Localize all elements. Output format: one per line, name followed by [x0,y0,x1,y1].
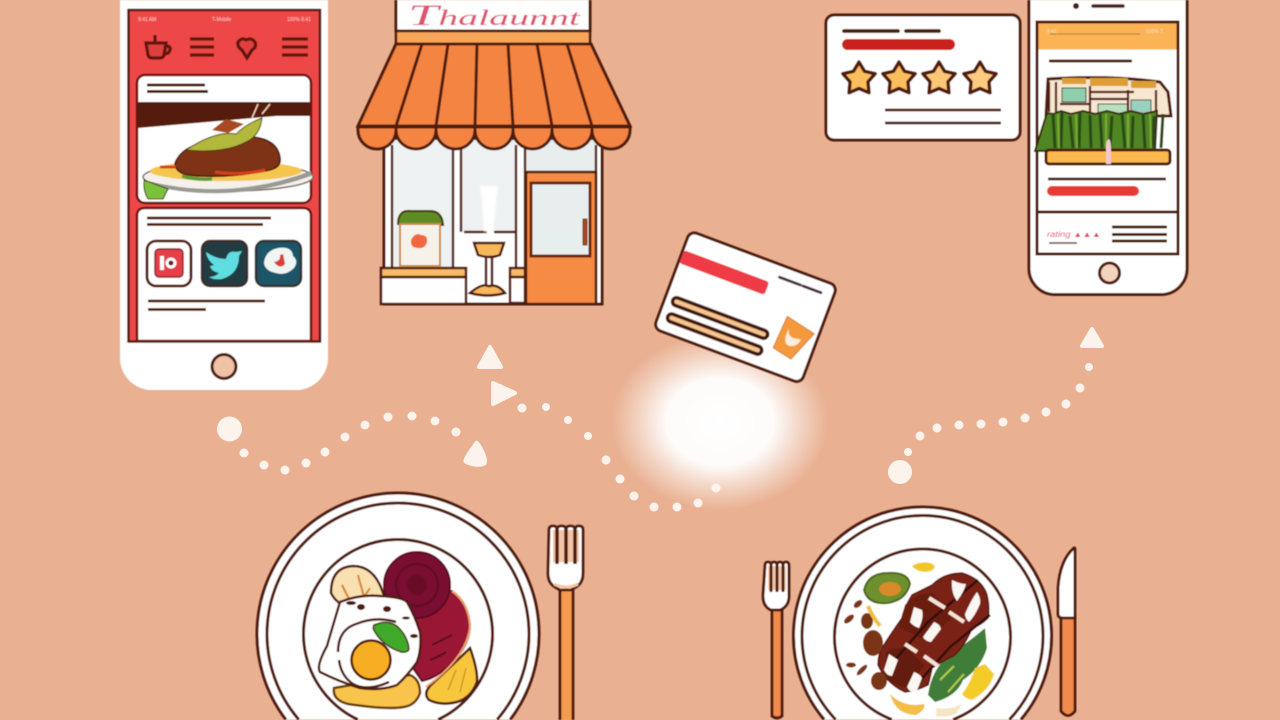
home button [1100,263,1120,283]
home button [212,354,236,378]
left plate with egg and beet [257,493,539,720]
arrowhead up to store [479,347,501,367]
store wall and windows [384,140,602,304]
icon: mascot app [256,241,301,286]
greens [928,628,987,702]
orange header [1038,24,1176,50]
right fork [763,562,789,718]
potted plant [398,211,443,266]
restaurant building photo [1035,78,1171,164]
avocado [864,573,910,603]
pastry [331,566,385,607]
striped awning [358,44,630,149]
dotted route right [888,329,1102,484]
beet [408,589,470,681]
garnish bits [842,598,887,690]
status bar text: 9:41 AM [138,17,156,23]
glow spot [612,334,828,510]
rating stars [843,62,996,93]
arrowhead [464,441,486,466]
dotted route center [493,383,720,512]
sign board [396,0,590,44]
toast underneath [334,675,420,708]
footer text [1047,230,1101,243]
footer text: rating ▲▲▲ [1047,230,1101,239]
status bar text: T-Mobile [212,17,231,23]
status bar text: 100% 9:41 [287,17,311,23]
door [526,172,596,304]
fried egg [319,596,421,689]
payment card [654,231,837,383]
card badge [769,316,814,362]
pineapple slice [426,648,477,704]
left phone with restaurant app [120,0,328,390]
app nav icons [146,35,308,58]
steak slices [878,573,990,693]
dotted route left [217,412,486,474]
card: featured dish [137,75,313,203]
card: social links [137,208,311,341]
orange header: 100% T [1146,29,1163,35]
ledge and base [381,268,525,304]
right plate with steak [793,507,1052,720]
arrowhead up to phone [1082,329,1102,346]
status bar text [138,17,311,23]
steam [480,186,498,232]
orange header: 9:41 [1047,29,1057,35]
icon: camera app [147,241,191,286]
review card [826,15,1020,140]
dish on plate [143,118,313,199]
knife [1058,548,1075,716]
right phone with restaurant listing [1029,0,1187,294]
glass table [470,243,505,296]
icon: bird app [202,241,247,286]
storefront [358,0,630,304]
left fork [548,526,583,720]
